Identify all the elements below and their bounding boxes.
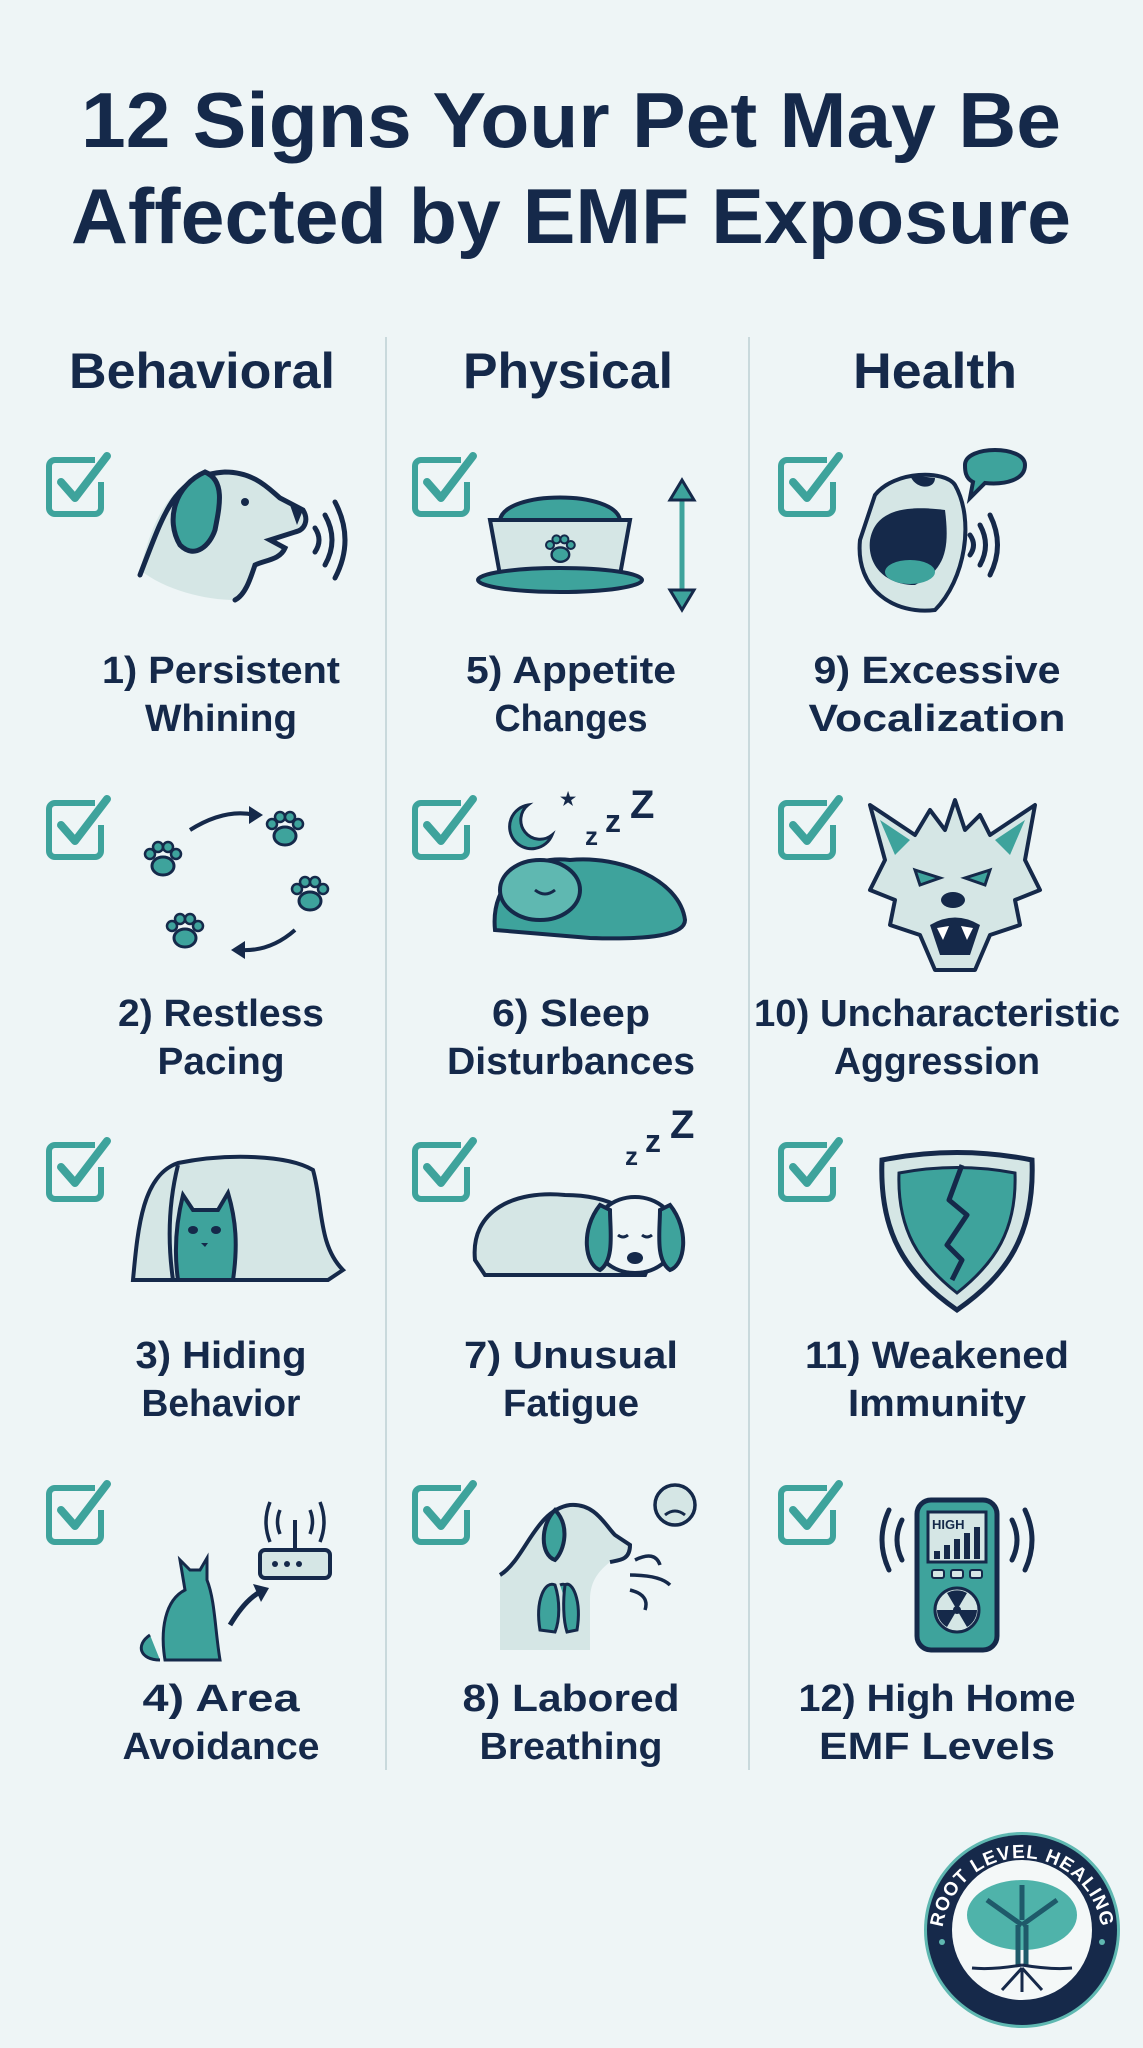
item 4: Area Avoidance: 4) Area <box>142 1678 301 1720</box>
item 10: Uncharacteristic Aggression <box>754 799 1120 1083</box>
item 7: Unusual Fatigue: 7) Unusual <box>464 1335 678 1377</box>
item 12: High Home EMF Levels: 12) High Home <box>798 1678 1076 1720</box>
item 2: Restless Pacing: 2) Restless <box>118 993 324 1035</box>
item 7: Unusual Fatigue: Fatigue <box>503 1383 639 1425</box>
icon: tired dog lying: z <box>645 1123 661 1159</box>
item 10: Uncharacteristic Aggression: Aggression <box>834 1041 1040 1083</box>
heading: Physical: Physical <box>463 343 673 399</box>
heading: Behavioral: Behavioral <box>69 343 335 399</box>
item 3: Hiding Behavior: Behavior <box>142 1383 301 1425</box>
icon: tired dog lying: z <box>625 1141 638 1171</box>
icon: cracked shield <box>882 1152 1032 1310</box>
item 7: Unusual Fatigue <box>415 1103 694 1425</box>
icon: food bowl with arrows <box>478 480 694 610</box>
item 9: Excessive Vocalization: 9) Excessive <box>814 650 1060 692</box>
icon: EMF meter <box>882 1500 1032 1650</box>
item 2: Restless Pacing: Pacing <box>158 1041 284 1083</box>
label: 1) Persistent <box>102 650 340 692</box>
icon: tired dog lying: Z <box>670 1103 694 1147</box>
item 6: Sleep Disturbances: 6) Sleep <box>492 993 650 1035</box>
icon: sleeping dog with moon <box>495 783 685 938</box>
icon: sleeping dog with moon: z <box>605 803 621 839</box>
title <box>71 76 1071 260</box>
icon: tired dog lying <box>475 1103 694 1275</box>
item 10: Uncharacteristic Aggression: 10) Uncharacteristic <box>754 993 1120 1035</box>
heading: Health: Health <box>853 343 1017 399</box>
icon: whining dog <box>140 472 345 600</box>
item 4: Area Avoidance: Avoidance <box>122 1726 320 1768</box>
icon: sleeping dog with moon: Z <box>630 783 654 827</box>
icon: sleeping dog with moon: z <box>585 821 598 851</box>
title: 12 Signs Your Pet May Be <box>81 76 1061 164</box>
icon: barking mouth with speech bubble <box>860 450 1025 611</box>
item 3: Hiding Behavior: 3) Hiding <box>136 1335 306 1377</box>
title: Affected by EMF Exposure <box>71 172 1071 260</box>
item 11: Weakened Immunity <box>781 1141 1069 1425</box>
icon: sleeping dog with moon: ★ <box>560 789 577 809</box>
item 6: Sleep Disturbances <box>415 783 695 1083</box>
item 2: Restless Pacing <box>49 799 328 1083</box>
item 12: High Home EMF Levels <box>781 1484 1076 1768</box>
item 4: Area Avoidance <box>49 1484 330 1768</box>
item 5: Appetite Changes: Changes <box>494 698 648 740</box>
item 8: Labored Breathing: Breathing <box>480 1726 662 1768</box>
icon: snarling wolf <box>870 800 1040 970</box>
item 8: Labored Breathing: 8) Labored <box>462 1678 680 1720</box>
item 3: Hiding Behavior <box>49 1141 343 1425</box>
icon: cat avoiding router <box>141 1502 330 1660</box>
icon: EMF meter: HIGH <box>932 1517 964 1532</box>
item 11: Weakened Immunity: Immunity <box>848 1383 1026 1425</box>
item 6: Sleep Disturbances: Disturbances <box>447 1041 695 1083</box>
icon: dog with lungs <box>500 1485 695 1650</box>
logo: Root Level Healing: ROOT LEVEL HEALING <box>930 1844 1113 1926</box>
item 9: Excessive Vocalization <box>781 450 1066 740</box>
item 5: Appetite Changes: 5) Appetite <box>466 650 676 692</box>
item 1: Persistent Whining: Whining <box>145 698 297 740</box>
item 8: Labored Breathing <box>415 1484 695 1768</box>
item 9: Excessive Vocalization: Vocalization <box>808 698 1066 740</box>
item 5: Appetite Changes <box>415 456 694 740</box>
item 12: High Home EMF Levels: EMF Levels <box>819 1726 1055 1768</box>
logo: Root Level Healing <box>924 1832 1120 2028</box>
icon: pacing paws <box>145 806 328 959</box>
item 1: Persistent Whining <box>49 456 345 740</box>
icon: cat under blanket <box>133 1157 343 1280</box>
item 11: Weakened Immunity: 11) Weakened <box>805 1335 1069 1377</box>
